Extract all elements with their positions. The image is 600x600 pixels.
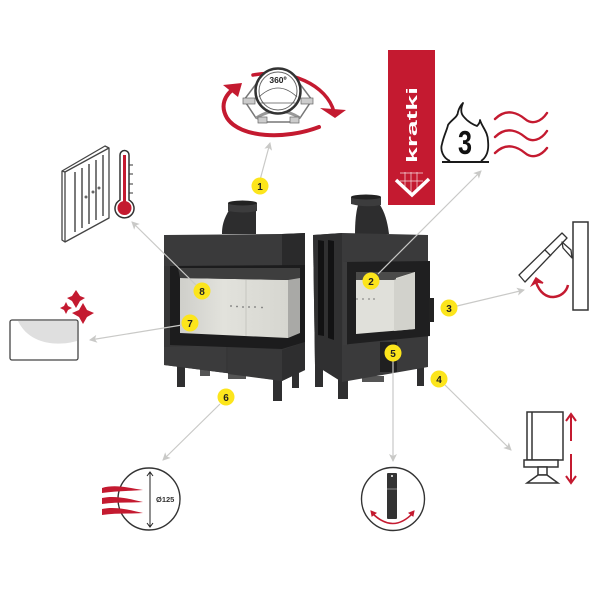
badge 2: 2	[368, 277, 374, 288]
icon: panel wall and thermometer	[62, 146, 134, 242]
glass pane	[10, 320, 78, 360]
left body	[164, 233, 305, 381]
heat waves	[495, 112, 547, 156]
up down arrows	[566, 414, 576, 483]
diameter arrow	[147, 472, 153, 527]
badge 4	[430, 370, 448, 388]
right fireplace	[313, 194, 434, 399]
tool	[387, 473, 397, 519]
diameter label: Ø125	[156, 495, 174, 504]
badge 8: 8	[199, 287, 205, 298]
left glass	[178, 268, 300, 338]
badge 8	[194, 282, 210, 300]
right door frame	[343, 261, 430, 345]
door leaf	[519, 233, 572, 282]
badge 2	[362, 272, 380, 290]
left fireplace	[164, 200, 305, 401]
left legs	[177, 364, 299, 401]
air streams	[102, 486, 143, 515]
right legs	[315, 363, 424, 399]
ash drawer panel	[380, 342, 397, 372]
badge 5: 5	[390, 349, 396, 360]
icon: handle tool	[362, 468, 424, 530]
badge 7: 7	[187, 319, 193, 330]
icon: flame class 3	[441, 103, 547, 163]
sparkles	[60, 290, 94, 324]
icon: hinged door	[519, 222, 588, 310]
badge 1	[252, 178, 268, 194]
badge 4: 4	[436, 375, 442, 386]
red rotation arrows	[224, 73, 334, 135]
icon: clean glass with sparkles	[10, 290, 94, 360]
badge 6	[218, 388, 234, 406]
side vent slots	[318, 240, 334, 340]
rotate arrow	[536, 282, 568, 297]
badge 1: 1	[257, 182, 263, 193]
wall panel	[62, 146, 109, 242]
panel bolts	[84, 186, 100, 198]
brand name: kratki	[404, 87, 421, 163]
right door handle	[429, 298, 434, 322]
right flue collar	[351, 194, 389, 234]
badge 7	[182, 314, 198, 332]
flue ring	[256, 68, 300, 114]
class number: 3	[458, 124, 472, 161]
flame outline	[441, 103, 488, 161]
icon: adjustable leg height	[524, 412, 576, 483]
icon: rotating flue 360	[223, 68, 346, 135]
flange	[244, 84, 312, 122]
wiped area	[18, 321, 77, 344]
number badges	[182, 178, 458, 406]
swing arrow	[372, 513, 413, 524]
left door frame	[170, 265, 305, 349]
badge 3: 3	[446, 304, 452, 315]
left flue collar	[222, 200, 257, 234]
thermometer	[115, 151, 134, 218]
box	[524, 412, 563, 483]
pointer arrows	[90, 143, 524, 461]
icon: air duct 125	[102, 468, 180, 530]
right body	[313, 233, 428, 382]
badge 5	[384, 344, 402, 362]
flame base	[442, 161, 489, 163]
brand arrow logo	[396, 172, 429, 196]
360 label: 360º	[269, 75, 287, 85]
badge 3	[440, 300, 458, 316]
badge 6: 6	[223, 393, 229, 404]
wall	[573, 222, 588, 310]
kratki banner	[388, 50, 435, 205]
right glass	[356, 272, 415, 334]
